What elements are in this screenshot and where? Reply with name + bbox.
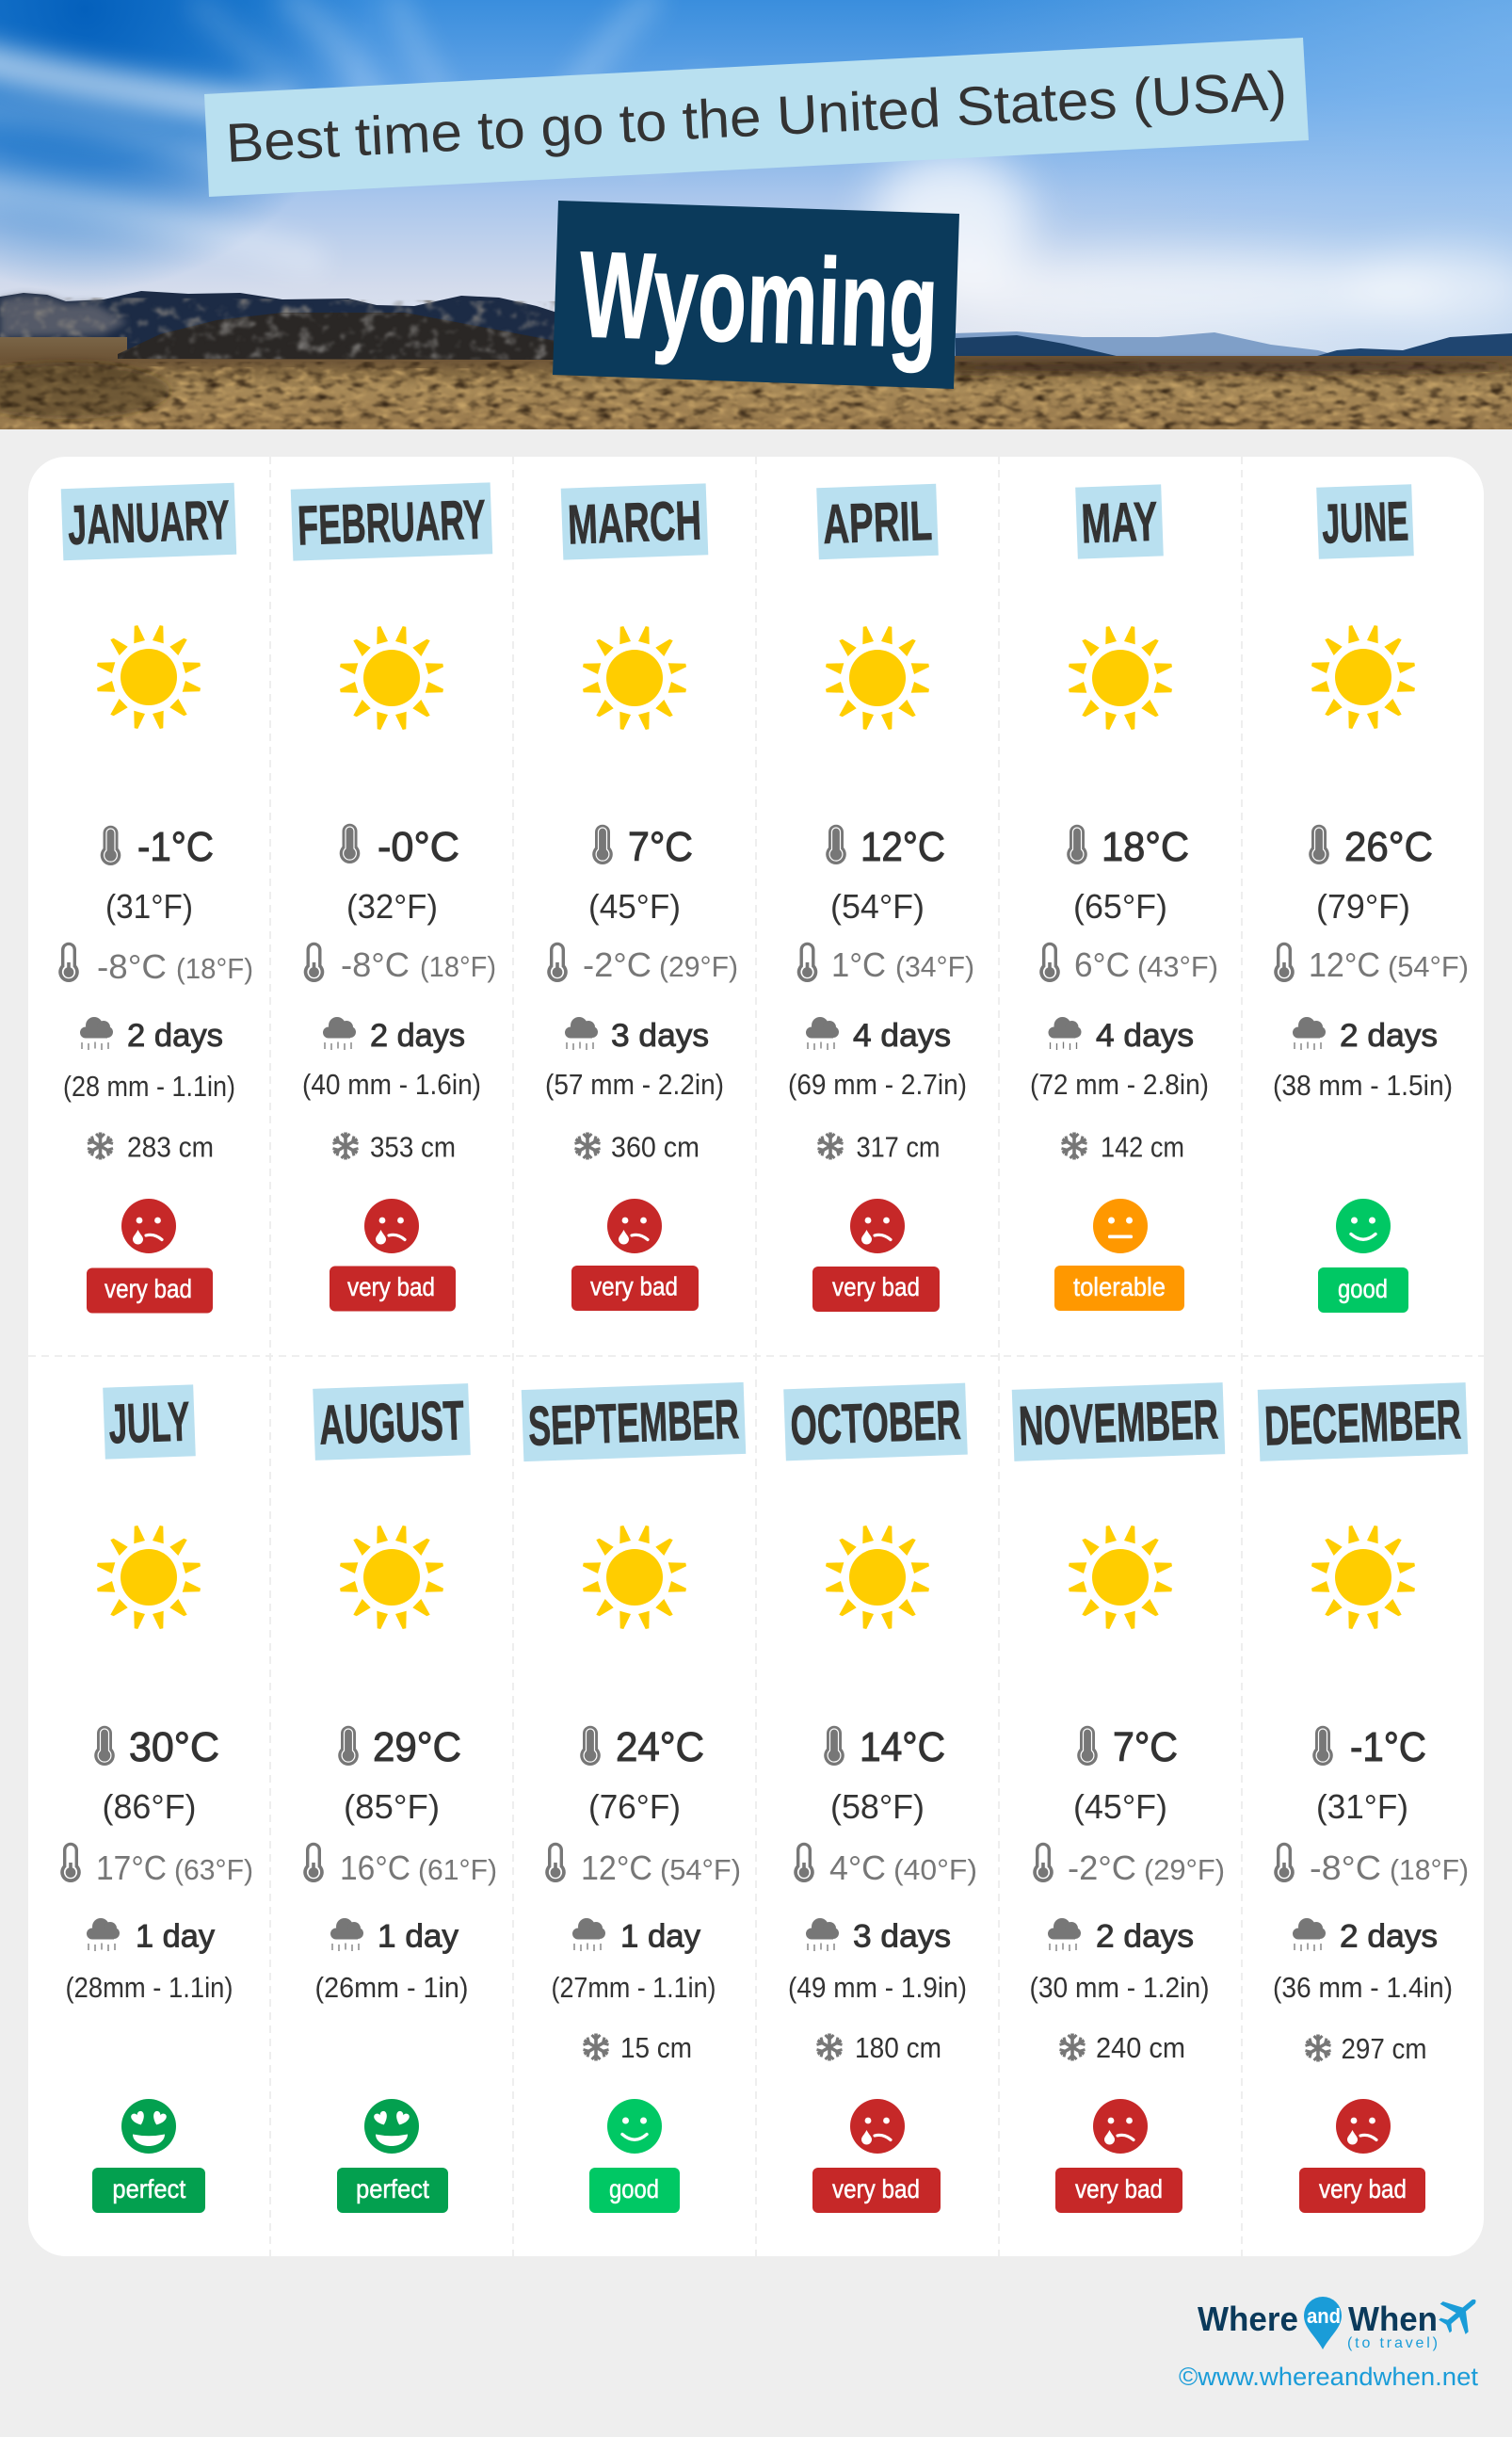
May rating: tolerable: [1073, 1272, 1166, 1301]
September label: [522, 1382, 746, 1461]
September high temperature: [580, 1724, 704, 1826]
May rating: [1054, 1199, 1184, 1311]
title banner: [204, 38, 1309, 197]
month: December: [1258, 1382, 1469, 2213]
July high temperature: [94, 1724, 219, 1826]
month: March: [545, 483, 738, 1311]
state name banner: Wyoming: [577, 225, 941, 374]
February high temperature: [340, 824, 459, 926]
December low temperature: [1274, 1843, 1469, 1887]
logo: Where and When: [1198, 2284, 1488, 2351]
October sun icon: [826, 1525, 929, 1629]
January snow: [87, 1130, 214, 1164]
month: April: [788, 484, 974, 1312]
June high temperature: 26°C: [1344, 824, 1433, 870]
August rain: (26mm - 1in): [314, 1971, 469, 2004]
January rain: [63, 1017, 235, 1103]
June low temperature: [1274, 943, 1469, 984]
January low temperature: -8°C: [97, 947, 167, 986]
November label: [1012, 1382, 1225, 1461]
November label: NOVEMBER: [1018, 1388, 1219, 1458]
December rain: [1273, 1918, 1453, 2004]
July high temperature: (86°F): [102, 1787, 196, 1826]
October label: OCTOBER: [789, 1389, 962, 1457]
May snow: [1060, 1130, 1184, 1164]
December low temperature: -8°C: [1310, 1848, 1381, 1887]
July low temperature: (63°F): [174, 1853, 253, 1886]
April snow: 317 cm: [857, 1130, 940, 1164]
July rain: [66, 1918, 233, 2004]
September rain: (27mm - 1.1in): [552, 1971, 716, 2004]
May label: [1075, 484, 1164, 559]
July low temperature: [60, 1843, 253, 1887]
March low temperature: [547, 943, 738, 984]
February rain: [302, 1017, 481, 1101]
May snow: 142 cm: [1101, 1130, 1184, 1164]
May rain: 4 days: [1096, 1018, 1194, 1054]
December high temperature: [1312, 1724, 1426, 1826]
January high temperature: [101, 824, 214, 926]
May label: MAY: [1080, 491, 1159, 555]
September rain: [552, 1918, 716, 2004]
May high temperature: (65°F): [1073, 887, 1167, 926]
January low temperature: [58, 943, 253, 986]
May low temperature: [1039, 943, 1218, 984]
March low temperature: (29°F): [659, 950, 738, 983]
November rain: (30 mm - 1.2in): [1030, 1971, 1209, 2004]
month: November: [1012, 1382, 1225, 2213]
month: May: [1030, 484, 1218, 1311]
month: January: [58, 483, 253, 1313]
September sun icon: [583, 1525, 686, 1629]
March low temperature: -2°C: [583, 945, 651, 984]
November snow: 240 cm: [1096, 2031, 1185, 2064]
August high temperature: 29°C: [373, 1724, 461, 1770]
July rating: perfect: [112, 2174, 186, 2203]
February low temperature: [304, 943, 496, 984]
April high temperature: (54°F): [830, 887, 925, 926]
May low temperature: (43°F): [1137, 950, 1218, 983]
March sun icon: [583, 626, 686, 730]
March rating: very bad: [590, 1271, 678, 1301]
June rain: [1273, 1017, 1453, 1102]
website credit: ©www.whereandwhen.net: [1179, 2363, 1478, 2391]
October rain: 3 days: [853, 1919, 951, 1955]
July label: JULY: [107, 1391, 191, 1455]
October low temperature: 4°C: [829, 1848, 886, 1887]
February low temperature: -8°C: [341, 945, 410, 984]
October label: [783, 1383, 968, 1461]
October high temperature: [824, 1724, 945, 1826]
April label: [816, 484, 939, 559]
April rain: 4 days: [853, 1018, 951, 1054]
October rain: [788, 1918, 967, 2004]
September rain: 1 day: [620, 1919, 700, 1955]
December high temperature: -1°C: [1350, 1724, 1426, 1770]
February rating: [330, 1199, 456, 1311]
November sun icon: [1069, 1525, 1172, 1629]
March label: [561, 483, 708, 560]
July rating: [92, 2099, 205, 2213]
July sun icon: [97, 1525, 201, 1629]
January rain: (28 mm - 1.1in): [63, 1070, 235, 1103]
November high temperature: 7°C: [1113, 1724, 1178, 1770]
October high temperature: (58°F): [830, 1787, 925, 1826]
January rain: 2 days: [127, 1018, 223, 1054]
March high temperature: [588, 824, 693, 926]
August low temperature: 16°C: [340, 1848, 410, 1887]
October snow: [815, 2031, 941, 2064]
April low temperature: 1°C: [831, 945, 886, 984]
header photo: Wyoming landscape: [0, 0, 1512, 429]
June rating: [1318, 1199, 1408, 1313]
August low temperature: (61°F): [418, 1853, 497, 1886]
February low temperature: (18°F): [420, 950, 496, 983]
April rating: [812, 1199, 940, 1312]
December high temperature: (31°F): [1316, 1787, 1408, 1826]
March label: MARCH: [567, 490, 702, 556]
May low temperature: 6°C: [1074, 945, 1130, 984]
July low temperature: 17°C: [96, 1848, 167, 1887]
October rating: [812, 2099, 941, 2213]
February label: FEBRUARY: [297, 489, 487, 557]
January snow: 283 cm: [127, 1130, 214, 1164]
February high temperature: -0°C: [378, 824, 459, 870]
December rating: [1299, 2099, 1425, 2213]
November high temperature: (45°F): [1073, 1787, 1167, 1826]
March snow: [573, 1130, 700, 1164]
April rain: [788, 1017, 967, 1101]
July label: [103, 1384, 196, 1460]
May rain: [1030, 1017, 1209, 1101]
November low temperature: [1033, 1843, 1225, 1887]
October low temperature: [794, 1843, 977, 1887]
September snow: 15 cm: [620, 2031, 692, 2064]
August sun icon: [340, 1525, 443, 1629]
January sun icon: [97, 625, 201, 729]
month: September: [522, 1382, 746, 2213]
April high temperature: [826, 824, 945, 926]
November low temperature: (29°F): [1144, 1853, 1225, 1886]
March high temperature: (45°F): [588, 887, 681, 926]
June label: JUNE: [1321, 490, 1409, 556]
September high temperature: (76°F): [588, 1787, 681, 1826]
August rain: 1 day: [378, 1919, 458, 1955]
April snow: [816, 1130, 940, 1164]
June rain: 2 days: [1340, 1018, 1438, 1054]
September label: SEPTEMBER: [527, 1388, 740, 1458]
December low temperature: (18°F): [1390, 1853, 1469, 1886]
December snow: [1304, 2032, 1427, 2065]
October high temperature: 14°C: [860, 1724, 945, 1770]
April rating: very bad: [832, 1272, 920, 1301]
May sun icon: [1069, 626, 1172, 730]
logo: Where and When: (to travel): [1347, 2335, 1438, 2351]
January high temperature: -1°C: [137, 824, 214, 870]
logo: Where and When: When: [1348, 2300, 1438, 2338]
January label: JANUARY: [67, 489, 231, 557]
February label: [291, 482, 492, 561]
July high temperature: 30°C: [129, 1724, 219, 1770]
title banner: Best time to go to the United States (USA): [224, 60, 1288, 174]
month: February: [291, 482, 496, 1311]
February high temperature: (32°F): [346, 887, 438, 926]
August high temperature: [338, 1724, 461, 1826]
June sun icon: [1311, 625, 1415, 729]
November rating: very bad: [1075, 2174, 1163, 2203]
December snow: 297 cm: [1341, 2032, 1427, 2065]
June low temperature: 12°C: [1309, 945, 1380, 984]
December sun icon: [1311, 1525, 1415, 1629]
March rating: [571, 1199, 699, 1311]
June high temperature: [1309, 824, 1433, 926]
April label: APRIL: [822, 490, 933, 556]
November low temperature: -2°C: [1068, 1848, 1136, 1887]
April sun icon: [826, 626, 929, 730]
December rain: 2 days: [1340, 1919, 1438, 1955]
January high temperature: (31°F): [105, 887, 193, 926]
March rain: [545, 1017, 724, 1101]
October snow: 180 cm: [855, 2031, 941, 2064]
January rating: very bad: [105, 1274, 192, 1303]
July rain: (28mm - 1.1in): [66, 1971, 233, 2004]
August label: AUGUST: [318, 1389, 465, 1457]
June rating: good: [1338, 1274, 1388, 1303]
April low temperature: [797, 943, 974, 984]
September low temperature: [545, 1843, 741, 1887]
November rain: 2 days: [1096, 1919, 1194, 1955]
October rain: (49 mm - 1.9in): [788, 1971, 967, 2004]
logo: Where and When: Where: [1198, 2300, 1298, 2338]
month: July: [60, 1384, 253, 2213]
March rain: (57 mm - 2.2in): [545, 1068, 724, 1101]
April high temperature: 12°C: [861, 824, 945, 870]
February rain: 2 days: [370, 1018, 465, 1054]
November rain: [1030, 1918, 1209, 2004]
May high temperature: 18°C: [1102, 824, 1189, 870]
month: June: [1273, 484, 1469, 1313]
March snow: 360 cm: [611, 1130, 700, 1164]
August low temperature: [303, 1843, 497, 1887]
state name banner: [553, 201, 959, 389]
logo: Where and When: and: [1307, 2304, 1341, 2328]
September snow: [582, 2031, 692, 2064]
month: October: [783, 1383, 977, 2213]
April low temperature: (34°F): [895, 950, 974, 983]
October rating: very bad: [832, 2174, 920, 2203]
January label: [61, 483, 236, 560]
September rating: [589, 2099, 680, 2213]
June low temperature: (54°F): [1388, 950, 1469, 983]
March high temperature: 7°C: [628, 824, 693, 870]
panel: calendar: [28, 457, 1484, 2256]
December rain: (36 mm - 1.4in): [1273, 1971, 1453, 2004]
January rating: [87, 1199, 213, 1313]
September low temperature: (54°F): [660, 1853, 741, 1886]
April rain: (69 mm - 2.7in): [788, 1068, 967, 1101]
September rating: good: [609, 2174, 659, 2203]
August rating: [337, 2099, 448, 2213]
January low temperature: (18°F): [176, 952, 253, 985]
February sun icon: [340, 626, 443, 730]
August high temperature: (85°F): [344, 1787, 440, 1826]
August label: [313, 1383, 471, 1461]
February snow: 353 cm: [370, 1130, 456, 1164]
November snow: [1058, 2031, 1185, 2064]
March rain: 3 days: [611, 1018, 709, 1054]
May rain: (72 mm - 2.8in): [1030, 1068, 1209, 1101]
October low temperature: (40°F): [893, 1853, 977, 1886]
February rating: very bad: [347, 1272, 435, 1301]
month: August: [303, 1383, 497, 2213]
July rain: 1 day: [136, 1919, 215, 1955]
June label: [1316, 484, 1414, 559]
December rating: very bad: [1319, 2174, 1407, 2203]
February rain: (40 mm - 1.6in): [302, 1068, 481, 1101]
November high temperature: [1073, 1724, 1178, 1826]
May high temperature: [1067, 824, 1189, 926]
August rating: perfect: [356, 2174, 429, 2203]
September high temperature: 24°C: [616, 1724, 704, 1770]
August rain: [314, 1918, 469, 2004]
February snow: [331, 1130, 456, 1164]
June rain: (38 mm - 1.5in): [1273, 1069, 1453, 1102]
September low temperature: 12°C: [581, 1848, 652, 1887]
June high temperature: (79°F): [1316, 887, 1410, 926]
November rating: [1055, 2099, 1182, 2213]
